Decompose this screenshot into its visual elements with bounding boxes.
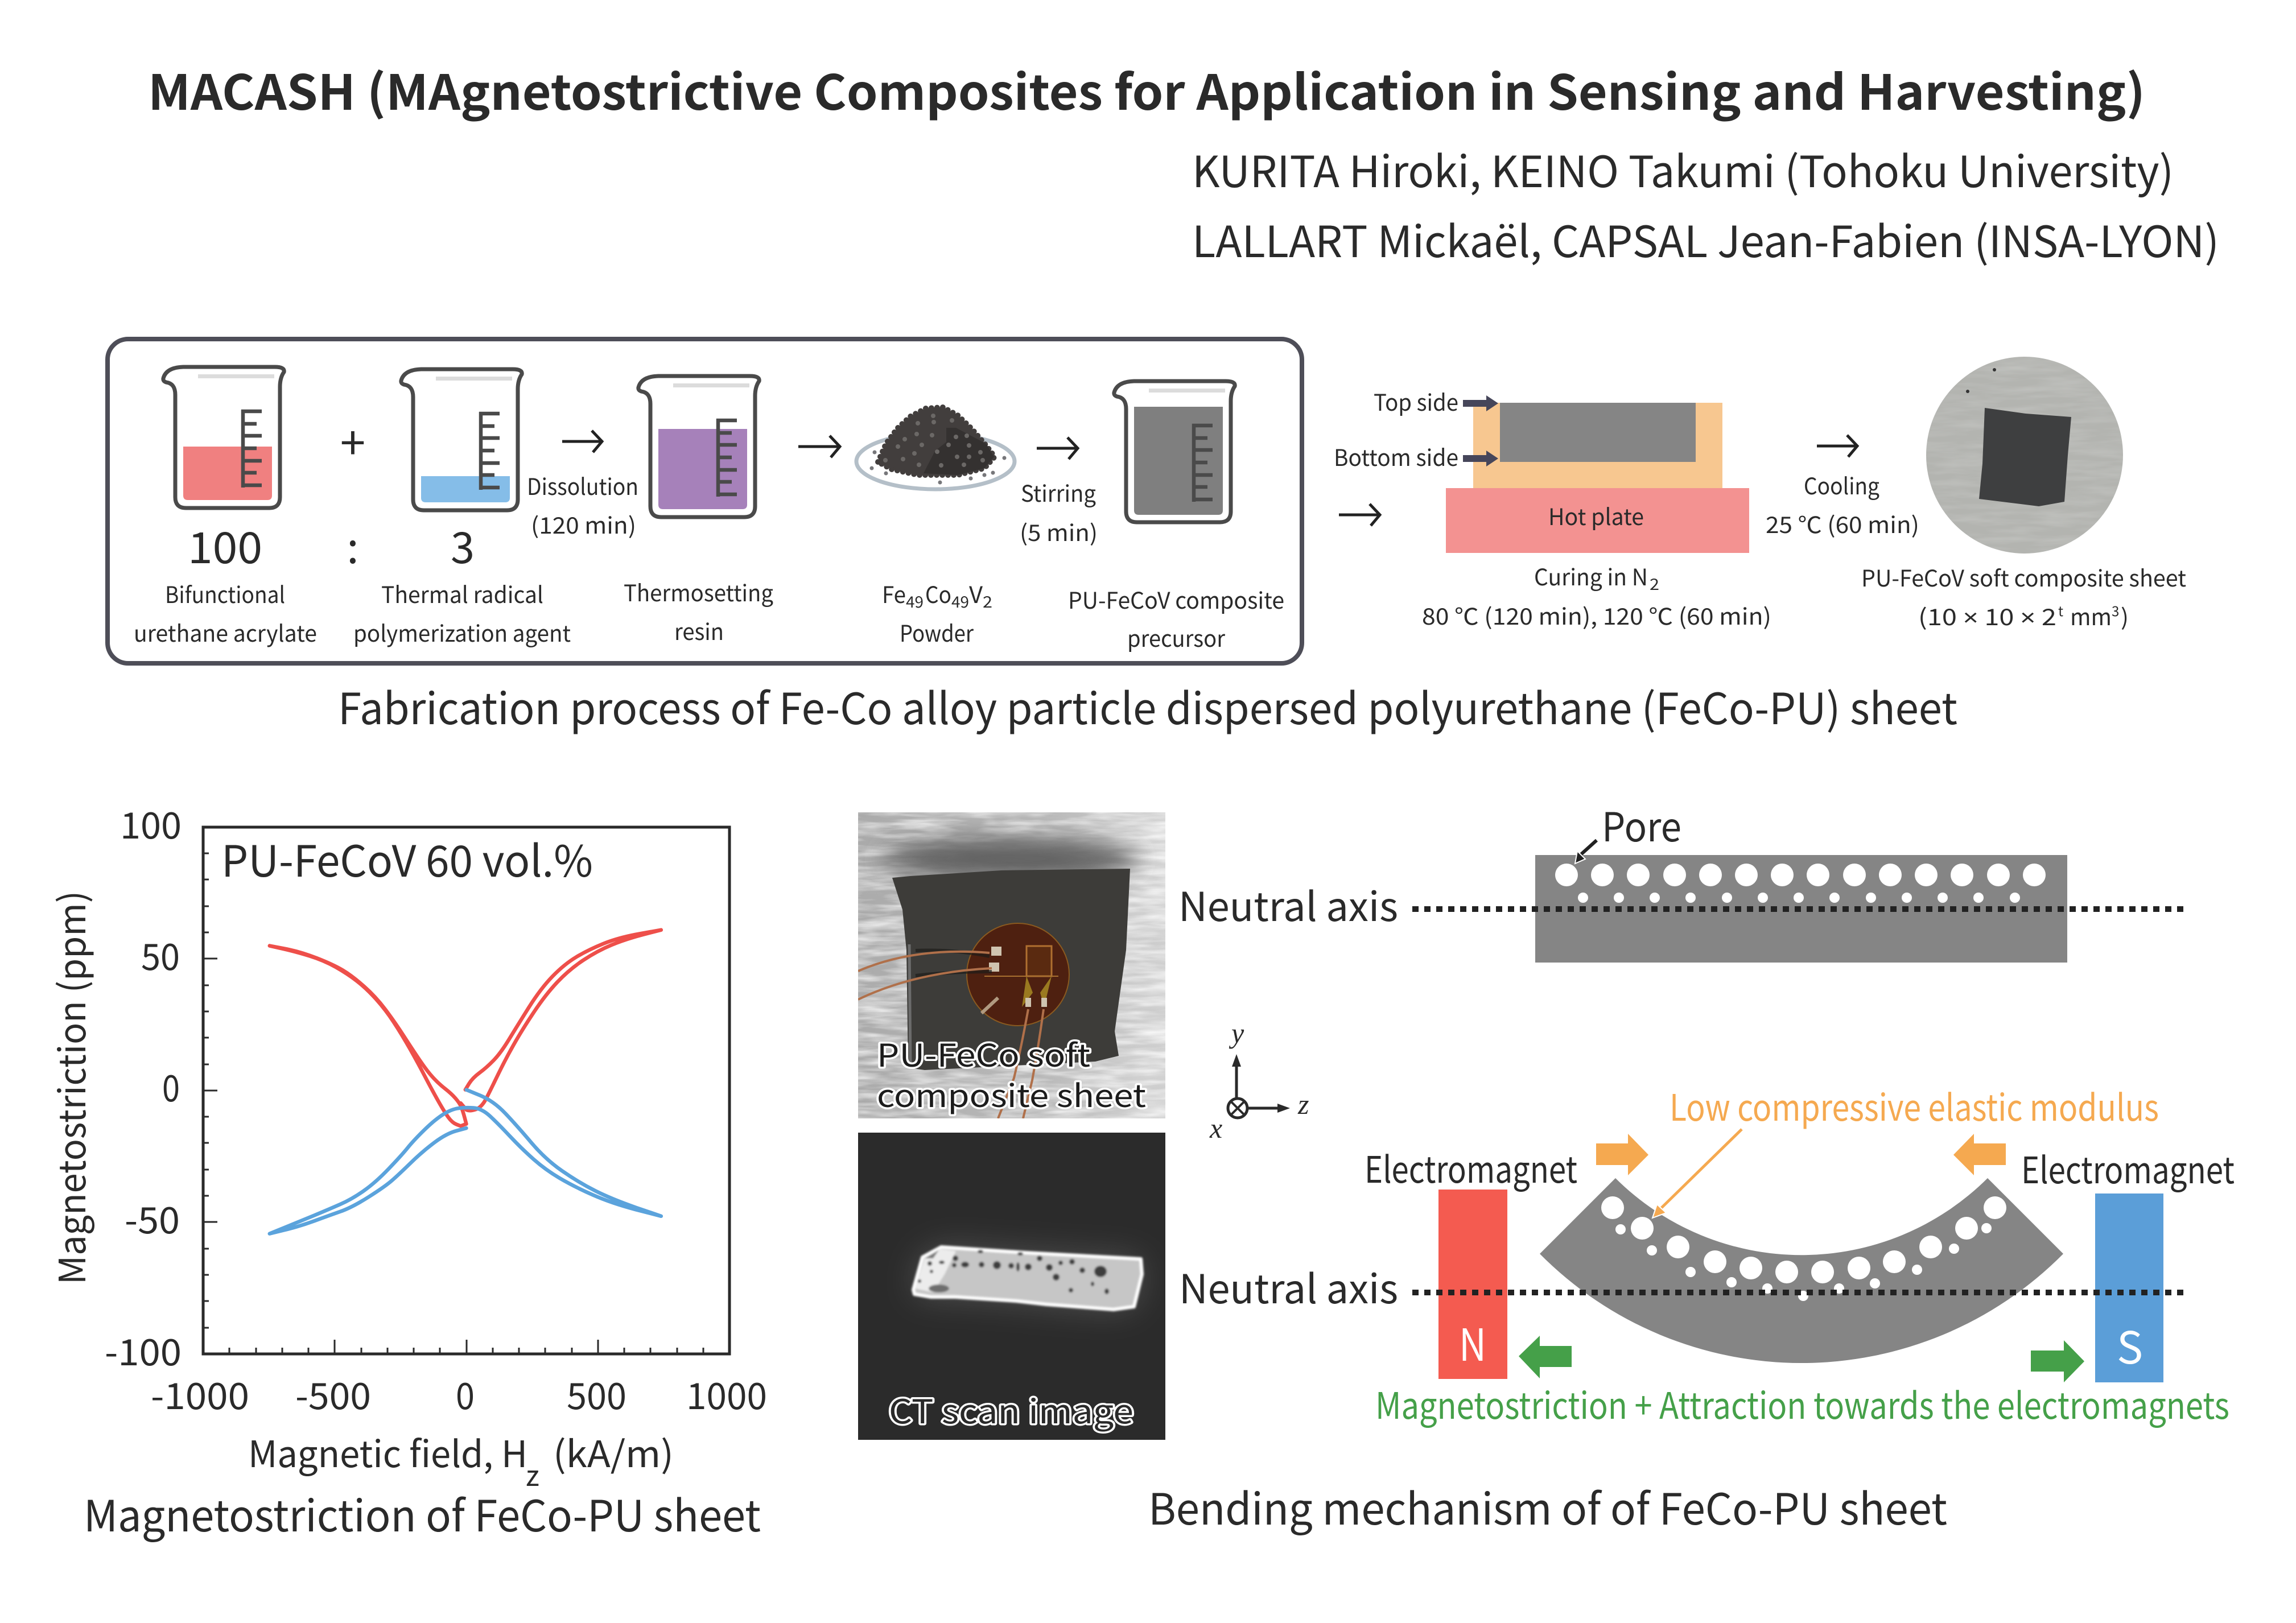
electromagnet labels bbox=[1365, 1141, 2235, 1194]
chart annotation: PU-FeCoV 60 vol.% bbox=[221, 827, 593, 889]
icon: beaker gray bbox=[1114, 381, 1235, 522]
neutral axis line bbox=[1412, 906, 2184, 912]
arrow: green right bbox=[2031, 1340, 2084, 1382]
photo caption: CT scan image bbox=[889, 1385, 1133, 1433]
pores: small row bbox=[1578, 893, 2020, 903]
hot plate label: Hot plate bbox=[1548, 499, 1644, 532]
cooling label bbox=[1766, 468, 1919, 540]
label: powder: 2 bbox=[983, 590, 992, 612]
y tick labels: -100 bbox=[105, 1324, 182, 1376]
ratio numbers: 100 bbox=[188, 513, 262, 576]
diagram: bent sheet between electromagnets bbox=[1179, 1079, 2235, 1430]
axis labels: y bbox=[1229, 1017, 1244, 1049]
photo: sample with strain gauge bbox=[858, 812, 1165, 1118]
label: soft composite sheet bbox=[1861, 560, 2186, 632]
authors: LALLART Mickaël, CAPSAL Jean-Fabien (INSA-LYON) bbox=[1192, 207, 2219, 270]
x tick labels: 1000 bbox=[686, 1368, 767, 1420]
pores: large row bbox=[1555, 864, 2046, 886]
title: MACASH (MAgnetostrictive Composites for Application in Sensing and Harvesting) bbox=[148, 54, 2145, 124]
arrow: top side bbox=[1463, 395, 1498, 411]
label: polymerization agent: polymerization agent bbox=[353, 616, 571, 649]
label: composite precursor: precursor bbox=[1127, 621, 1225, 654]
neutral axis label: Neutral axis bbox=[1179, 1258, 1398, 1315]
panel: resin preparation bbox=[108, 339, 1302, 663]
label: polymerization agent: Thermal radical bbox=[381, 577, 543, 610]
stirring label: Stirring bbox=[1021, 476, 1096, 509]
y tick labels: 50 bbox=[141, 928, 180, 981]
label: urethane acrylate: urethane acrylate bbox=[134, 616, 317, 649]
label: thermosetting resin: Thermosetting bbox=[624, 575, 773, 608]
curing label: 80 ℃ (120 min), 120 ℃ (60 min) bbox=[1422, 598, 1771, 631]
arrow: elastic modulus pointer bbox=[1652, 1129, 1742, 1218]
chart: magnetostriction bbox=[44, 797, 767, 1494]
x tick labels: 500 bbox=[567, 1368, 626, 1420]
y tick labels bbox=[105, 797, 182, 1376]
label: powder: Co bbox=[925, 577, 951, 610]
x axis label: z bbox=[526, 1453, 539, 1494]
arrow: bottom side bbox=[1463, 451, 1498, 466]
curves: red bbox=[270, 930, 661, 1126]
electromagnet labels: Electromagnet bbox=[1365, 1141, 1577, 1193]
ratio numbers: 3 bbox=[451, 513, 475, 576]
icon: coordinate axes bbox=[1209, 1017, 1309, 1144]
neutral axis line bbox=[1412, 1290, 2184, 1295]
label: urethane acrylate: Bifunctional bbox=[165, 577, 285, 610]
y axis label: Magnetostriction (ppm) bbox=[44, 891, 96, 1285]
photo: CT scan bbox=[858, 1133, 1165, 1440]
label: soft composite sheet: 3 bbox=[2112, 600, 2119, 620]
label: soft composite sheet: PU-FeCoV soft composite sheet bbox=[1861, 560, 2186, 593]
label: soft composite sheet: t bbox=[2058, 600, 2063, 620]
curing label bbox=[1422, 559, 1771, 631]
photo caption: PU-FeCo soft bbox=[877, 1030, 1090, 1076]
electromagnet labels: Electromagnet bbox=[2021, 1142, 2235, 1194]
label: urethane acrylate bbox=[134, 577, 317, 649]
curves: blue bbox=[270, 1090, 661, 1234]
ratio numbers bbox=[188, 513, 475, 576]
x tick labels: 0 bbox=[456, 1368, 475, 1420]
bent sheet bbox=[1540, 1178, 2063, 1363]
axis labels: z bbox=[1297, 1088, 1309, 1120]
icon: beaker red bbox=[163, 367, 284, 508]
label: soft composite sheet: (10 × 10 × 2 bbox=[1918, 599, 2056, 632]
x tick labels bbox=[151, 1368, 767, 1420]
photo caption bbox=[877, 1030, 1146, 1116]
photo caption: composite sheet bbox=[877, 1071, 1146, 1116]
diagram: sheet before bending bbox=[1178, 796, 2184, 963]
heading: fabrication process: Fabrication process of Fe-Co alloy particle dispersed polyurethane (FeCo-PU) sheet bbox=[338, 674, 1957, 737]
pores: large bbox=[1601, 1196, 2006, 1283]
label: soft composite sheet: mm bbox=[2070, 599, 2112, 632]
axis labels bbox=[1209, 1017, 1309, 1144]
label: polymerization agent bbox=[353, 577, 571, 649]
arrow: stirring bbox=[1037, 437, 1078, 459]
diagram: curing on hot plate bbox=[1334, 385, 1749, 553]
arrow: green left bbox=[1519, 1336, 1572, 1378]
heading: bending mechanism: Bending mechanism of of FeCo-PU sheet bbox=[1148, 1475, 1947, 1537]
label: thermosetting resin bbox=[624, 575, 773, 647]
arrow: dissolution bbox=[562, 431, 602, 452]
label: powder: V bbox=[969, 577, 983, 610]
arrow: to curing bbox=[1339, 504, 1380, 526]
electromagnet letters: S bbox=[2117, 1313, 2143, 1377]
pores: small bbox=[1615, 1223, 1992, 1301]
label: composite precursor: PU-FeCoV composite bbox=[1068, 583, 1284, 616]
bottom side label: Bottom side bbox=[1334, 440, 1458, 473]
label: powder: 49 bbox=[951, 590, 969, 612]
arrow: pore bbox=[1575, 840, 1597, 864]
ratio numbers: : bbox=[347, 513, 359, 576]
heading: magnetostriction: Magnetostriction of FeCo-PU sheet bbox=[84, 1481, 761, 1544]
neutral axis label: Neutral axis bbox=[1178, 875, 1398, 933]
arrow: cooling bbox=[1817, 435, 1857, 457]
y tick labels: 0 bbox=[162, 1060, 180, 1112]
pore label: Pore bbox=[1602, 796, 1681, 853]
x axis label: (kA/m) bbox=[553, 1426, 674, 1478]
dissolution label: (120 min) bbox=[531, 507, 636, 540]
x axis label bbox=[248, 1426, 674, 1494]
electromagnet N bbox=[1438, 1190, 1507, 1379]
axis labels: x bbox=[1209, 1112, 1222, 1144]
arrow: orange left bbox=[1596, 1134, 1648, 1175]
stirring label: (5 min) bbox=[1020, 515, 1098, 548]
label: powder: Powder bbox=[900, 616, 974, 649]
elastic modulus label: Low compressive elastic modulus bbox=[1670, 1079, 2159, 1131]
icon: beaker purple bbox=[638, 376, 759, 517]
arrow: orange right bbox=[1953, 1134, 2006, 1175]
authors bbox=[1192, 137, 2219, 270]
electromagnet letters: N bbox=[1459, 1310, 1486, 1374]
curing label: 2 bbox=[1650, 572, 1659, 594]
x tick labels: -500 bbox=[295, 1368, 371, 1420]
x axis label: Magnetic field, H bbox=[248, 1426, 527, 1478]
dissolution label: Dissolution bbox=[527, 469, 638, 502]
label: composite precursor bbox=[1068, 583, 1284, 654]
authors: KURITA Hiroki, KEINO Takumi (Tohoku University) bbox=[1192, 137, 2174, 200]
photo: composite sheet sample bbox=[1926, 357, 2123, 554]
cooling label: Cooling bbox=[1804, 468, 1879, 501]
icon: powder on plate bbox=[856, 407, 1015, 489]
electromagnet letters bbox=[1459, 1310, 2143, 1377]
x tick labels: -1000 bbox=[151, 1368, 249, 1420]
label: thermosetting resin: resin bbox=[674, 614, 724, 647]
cooling label: 25 ℃ (60 min) bbox=[1766, 507, 1919, 540]
icon: beaker blue bbox=[401, 369, 522, 510]
electromagnet S bbox=[2095, 1193, 2163, 1382]
plus sign: + bbox=[340, 407, 365, 473]
curing label: Curing in N bbox=[1534, 559, 1648, 592]
label: soft composite sheet: ) bbox=[2121, 599, 2129, 632]
dissolution label bbox=[527, 469, 638, 540]
arrow: add powder bbox=[798, 436, 840, 457]
label: powder: Fe bbox=[882, 577, 906, 610]
y tick labels: -50 bbox=[125, 1192, 180, 1244]
top side label: Top side bbox=[1374, 385, 1458, 418]
label: powder bbox=[882, 577, 992, 649]
stirring label bbox=[1020, 476, 1098, 548]
y tick labels: 100 bbox=[120, 797, 182, 849]
label: powder: 49 bbox=[906, 590, 924, 612]
